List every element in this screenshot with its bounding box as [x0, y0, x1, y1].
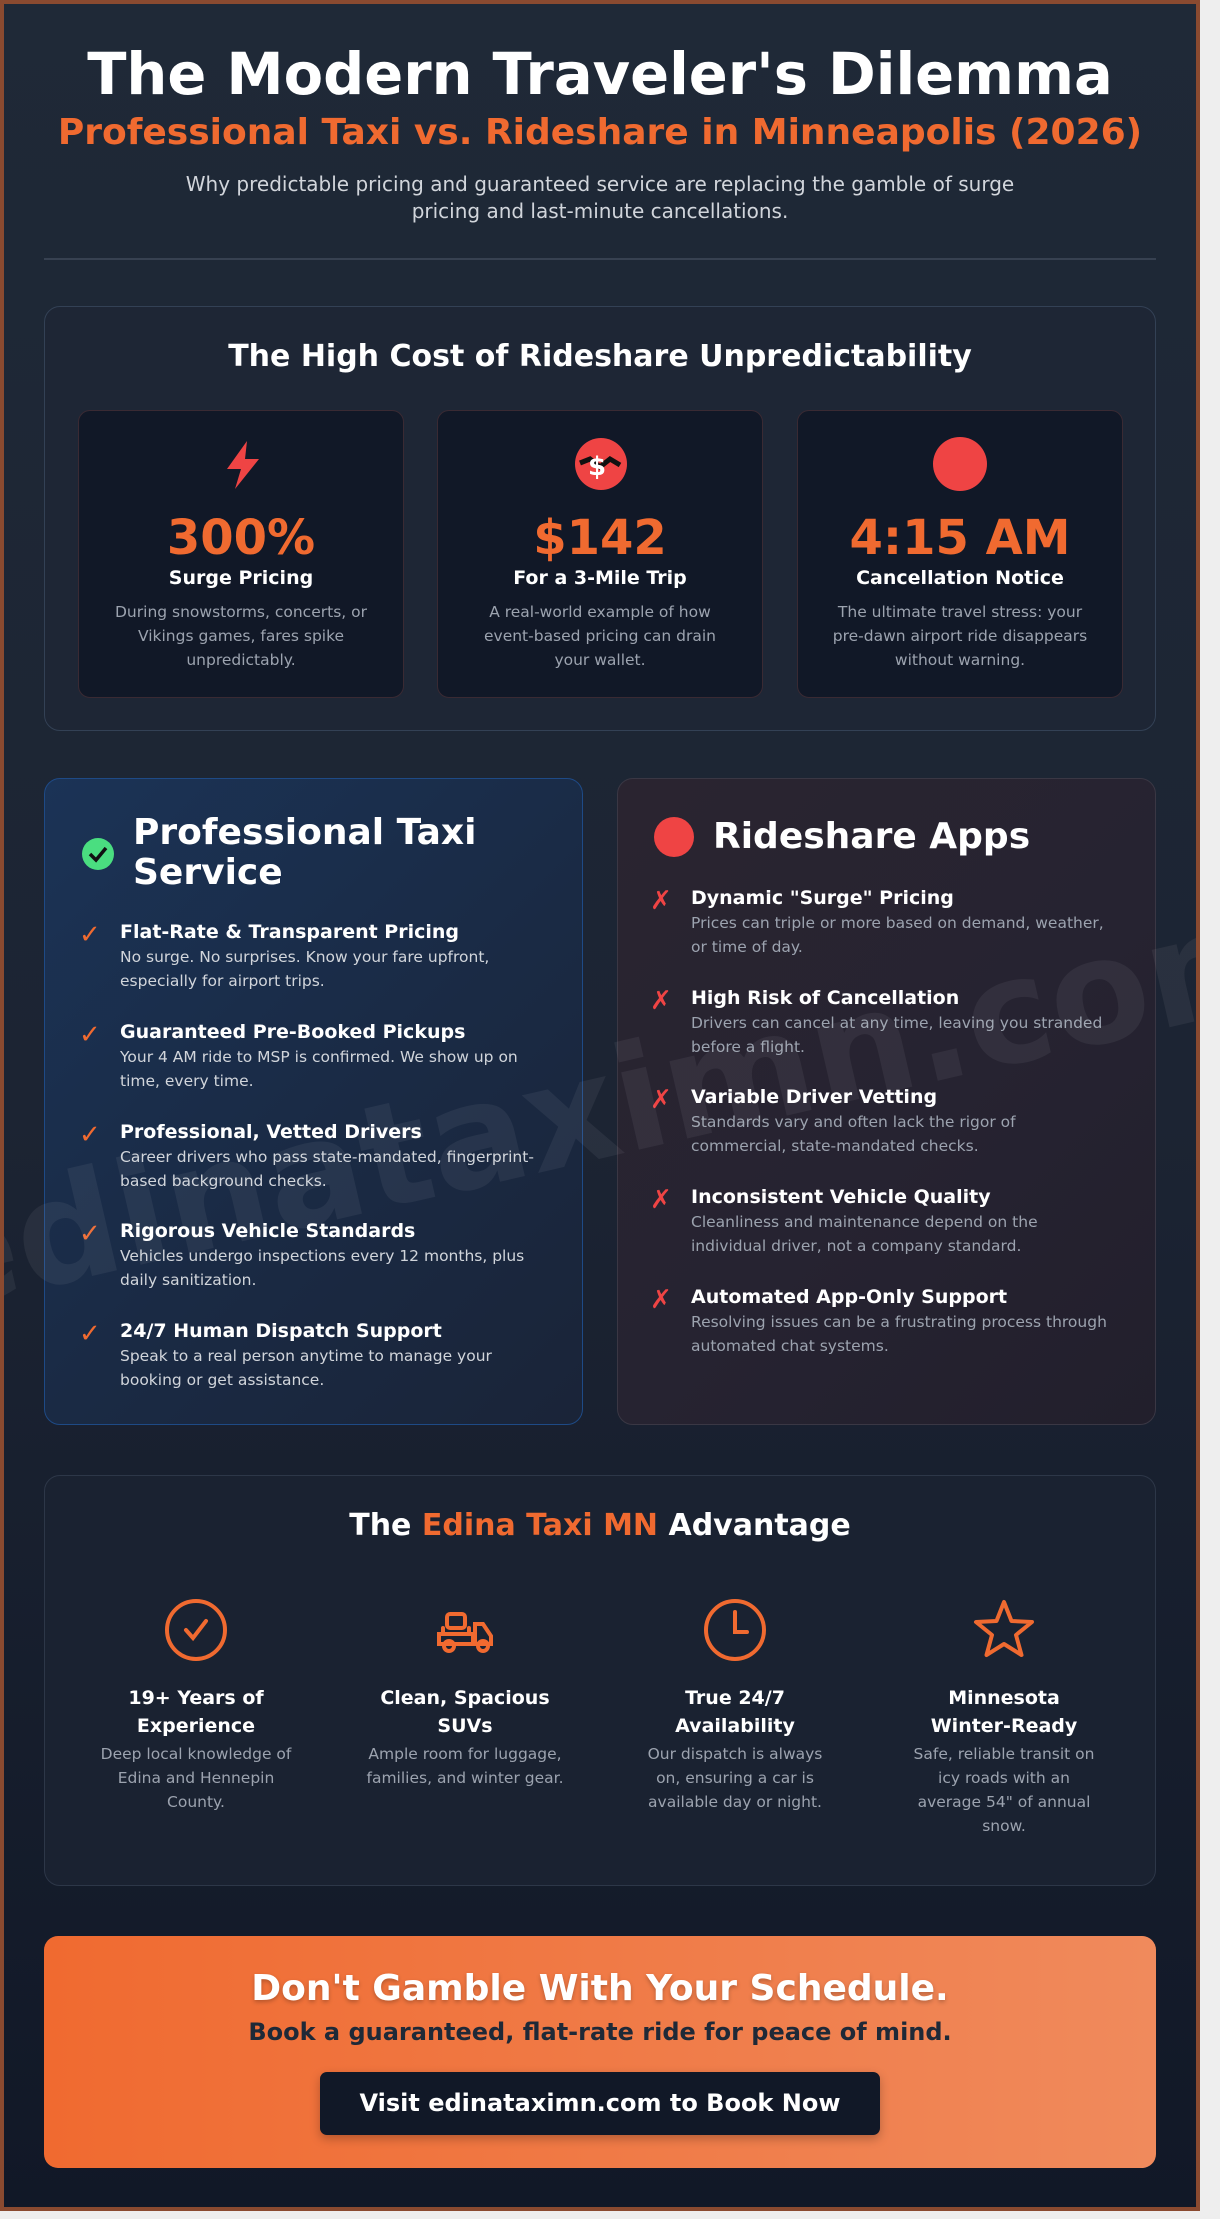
item: Flat-Rate & Transparent Pricing [120, 921, 459, 943]
item: Rigorous Vehicle Standards [120, 1220, 415, 1242]
feature: winter ready: Winter-Ready [931, 1715, 1077, 1737]
card: 3-mile trip: A real-world example of how event-based pricing can drain your wallet. [484, 603, 716, 669]
card: surge pricing [78, 410, 404, 698]
card: cancellation: Cancellation Notice [856, 567, 1064, 589]
heading: Professional Taxi [133, 812, 476, 853]
panel: edina taxi advantage [44, 1475, 1156, 1886]
title: The Modern Traveler's Dilemma [87, 41, 1113, 108]
item: ✓ [79, 920, 101, 950]
feature: winter ready: icy roads with an [938, 1769, 1070, 1787]
item: Drivers can cancel at any time, leaving you stranded before a flight. [691, 1014, 1102, 1056]
intro text: Why predictable pricing and guaranteed service are replacing the gamble of surge [186, 172, 1014, 196]
CTA heading: Don't Gamble With Your Schedule. [251, 1968, 949, 2009]
heading [133, 812, 476, 893]
subtitle: Professional Taxi vs. Rideshare in Minneapolis (2026) [58, 112, 1142, 153]
item: Your 4 AM ride to MSP is confirmed. We show up on time, every time. [120, 1048, 518, 1090]
item: Prices can triple or more based on demand, weather, [691, 914, 1104, 932]
item: Vehicles undergo inspections every 12 months, plus daily sanitization. [120, 1247, 524, 1289]
card: cancellation [797, 410, 1123, 698]
feature: SUVs [366, 1612, 564, 1787]
icon: money: $ [588, 452, 606, 482]
card: surge pricing: Surge Pricing [169, 567, 313, 589]
item [650, 986, 1102, 1056]
intro text [186, 172, 1014, 223]
item: Cleanliness and maintenance depend on the individual driver, not a company standard. [691, 1213, 1038, 1255]
feature: 24/7: Our dispatch is always [648, 1745, 822, 1763]
feature: SUVs: SUVs [437, 1715, 493, 1737]
item: Standards vary and often lack the rigor of commercial, state-mandated checks. [691, 1113, 1016, 1155]
feature: winter ready: average 54" of annual [918, 1793, 1090, 1811]
item [650, 1285, 1107, 1355]
item [650, 1085, 1016, 1155]
card: cancellation: The ultimate travel stress: your pre-dawn airport ride disappears without warning. [833, 603, 1087, 669]
feature: experience: Deep local knowledge of Edina and Hennepin County. [101, 1745, 291, 1811]
item [79, 1319, 492, 1389]
feature: winter ready: Minnesota [948, 1687, 1060, 1709]
item [79, 1020, 518, 1090]
feature: experience: Experience [137, 1715, 255, 1737]
item: Resolving issues can be a frustrating process through automated chat systems. [691, 1313, 1107, 1355]
card: 3-mile trip: $142 [533, 510, 667, 566]
item [79, 1120, 534, 1190]
heading: Service [133, 852, 283, 893]
item: ✗ [650, 1185, 672, 1215]
item: ✗ [650, 1085, 672, 1115]
feature: 24/7: Availability [675, 1715, 795, 1737]
item: Variable Driver Vetting [691, 1086, 937, 1108]
item: Automated App-Only Support [691, 1286, 1007, 1308]
feature: SUVs: Clean, Spacious [380, 1687, 550, 1709]
item [650, 1185, 1038, 1255]
panel: professional taxi service [44, 778, 583, 1425]
feature: experience [101, 1599, 292, 1811]
item: ✓ [79, 1319, 101, 1349]
feature: winter ready: Safe, reliable transit on [914, 1745, 1094, 1763]
item: ✓ [79, 1120, 101, 1150]
item [650, 886, 1104, 956]
feature: 24/7 [648, 1599, 822, 1811]
item: Inconsistent Vehicle Quality [691, 1186, 991, 1208]
icon: red circle [654, 817, 694, 857]
item [79, 920, 489, 990]
feature: winter ready [914, 1600, 1094, 1835]
item: ✗ [650, 886, 672, 916]
button: Visit edinataximn.com to Book Now [360, 2089, 840, 2117]
heading: The Edina Taxi MN Advantage [349, 1508, 851, 1543]
item: ✗ [650, 1285, 672, 1315]
panel: rideshare apps [617, 778, 1156, 1425]
item: Speak to a real person anytime to manage your booking or get assistance. [120, 1347, 492, 1389]
item: Career drivers who pass state-mandated, fingerprint-based background checks. [120, 1148, 534, 1190]
item: 24/7 Human Dispatch Support [120, 1320, 442, 1342]
feature: SUVs: Ample room for luggage, families, and winter gear. [366, 1745, 564, 1787]
card: 3-mile trip [437, 410, 763, 698]
card: 3-mile trip: For a 3-Mile Trip [513, 567, 687, 589]
item: Guaranteed Pre-Booked Pickups [120, 1021, 465, 1043]
feature: experience: 19+ Years of [128, 1687, 264, 1709]
intro text: pricing and last-minute cancellations. [412, 199, 788, 223]
button [320, 2072, 880, 2135]
item: Dynamic "Surge" Pricing [691, 887, 954, 909]
heading: The High Cost of Rideshare Unpredictability [228, 339, 972, 374]
item: ✓ [79, 1219, 101, 1249]
card: cancellation: 4:15 AM [849, 510, 1070, 566]
icon: lightning [227, 441, 259, 489]
feature: winter ready: snow. [982, 1817, 1026, 1835]
card: surge pricing: During snowstorms, concerts, or Vikings games, fares spike unpredictably. [115, 603, 367, 669]
feature: 24/7: on, ensuring a car is available day or night. [648, 1769, 822, 1811]
icon: money [575, 438, 627, 490]
card: surge pricing: 300% [167, 510, 315, 566]
item: No surge. No surprises. Know your fare upfront, especially for airport trips. [120, 948, 489, 990]
item: ✓ [79, 1020, 101, 1050]
heading: Rideshare Apps [713, 816, 1030, 857]
item: Professional, Vetted Drivers [120, 1121, 422, 1143]
item: High Risk of Cancellation [691, 987, 959, 1009]
item: or time of day. [691, 938, 803, 956]
CTA subheading: Book a guaranteed, flat-rate ride for peace of mind. [248, 2018, 952, 2046]
panel: call to action [44, 1936, 1156, 2168]
panel: high cost of rideshare unpredictability [44, 306, 1156, 731]
icon: green check [82, 838, 114, 870]
icon: red circle [933, 437, 987, 491]
item [79, 1219, 524, 1289]
item: ✗ [650, 986, 672, 1016]
feature: 24/7: True 24/7 [685, 1687, 785, 1709]
